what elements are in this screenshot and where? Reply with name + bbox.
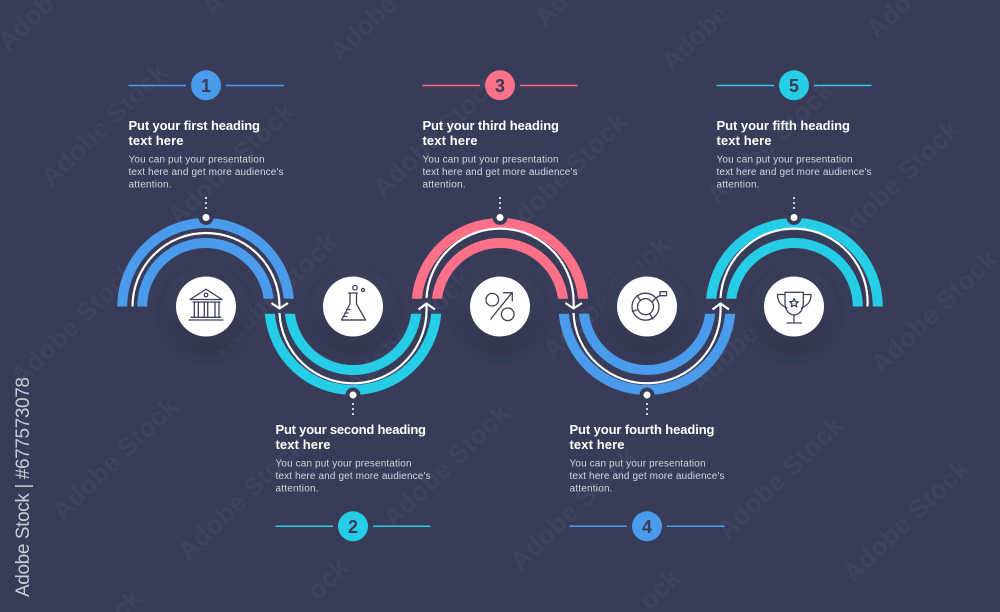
watermark pattern: Adobe Stock [367,68,505,203]
step 5 text: text here and get more audience's [716,167,872,178]
watermark pattern: ock [301,552,355,605]
step 5 text [716,118,872,191]
step 3 text: You can put your presentation [422,155,558,166]
step 1 text: Put your first heading [128,118,260,133]
node markers with dots [198,197,802,415]
step 3 text: attention. [422,180,466,191]
step 2 text [276,422,430,495]
step 2 text: You can put your presentation [276,459,412,470]
watermark pattern: Adobe Stock [162,96,300,231]
step 5 badge [716,70,872,100]
watermark pattern: Adobe Stock [495,107,633,242]
watermark pattern: Adobe Stock [172,431,310,566]
step 3 badge: 3 [495,76,505,96]
step 4 text [570,422,724,495]
step 5 text: Put your fifth heading [716,118,850,133]
step 2 badge [276,511,430,541]
step 5 text: text here [716,133,772,148]
step 4 badge [570,511,724,541]
step 4 text: You can put your presentation [570,459,706,470]
watermark pattern: Adobe Stock [865,244,1000,379]
step 1 text: text here [128,133,184,148]
watermark pattern: Adobe Stock [537,230,675,365]
watermark pattern: Adobe Stock [837,453,975,588]
arc 2: cyan [265,314,441,395]
step 1 text: attention. [128,180,172,191]
icon: percent arrow [470,276,530,336]
step 3 text: text here [422,133,478,148]
step 4 badge: 4 [642,517,652,537]
watermark pattern: Adobe Stock [827,114,965,249]
step 2 text: text here and get more audience's [276,471,430,482]
watermark pattern: Adobe Stock [711,410,849,545]
connector arrows [132,229,868,383]
watermark pattern: Adobe Stock [339,264,477,399]
watermark pattern: Adobe Stock [46,391,184,526]
step 1 badge [128,70,284,100]
watermark pattern: Adobe Stock [35,57,173,192]
side credit: Adobe Stock | #677573078 [13,377,34,597]
arc 4: blue [559,314,735,395]
step 4 text: text here and get more audience's [570,471,724,482]
icon shadow discs [163,266,837,352]
step 1 text [128,118,284,191]
step 2 badge: 2 [348,517,358,537]
step 2 text: attention. [276,484,318,495]
watermark pattern: Adobe Stock [205,227,343,362]
step 3 text [422,118,578,191]
step 5 text: attention. [716,180,760,191]
step 3 text: text here and get more audience's [422,167,578,178]
step 2 text: Put your second heading [276,422,426,437]
icon: bank [176,276,236,336]
watermark pattern: Adobe Stock [377,398,515,533]
icon: flask [323,276,383,336]
step 1 text: text here and get more audience's [128,167,284,178]
watermark pattern: Adobe Stock [701,75,839,210]
watermark pattern: Adobe Stock [5,256,143,391]
arc 5: cyan [706,218,883,306]
arc 3: pink [412,218,588,299]
step 4 text: text here [570,437,624,452]
step 1 badge: 1 [201,76,211,96]
step 5 badge: 5 [789,76,799,96]
step 3 text: Put your third heading [422,118,559,133]
icon: ring target with flag [617,276,677,336]
arc 1: blue [117,218,294,306]
watermark pattern: Adobe Stock [684,262,822,397]
step 1 text: You can put your presentation [128,155,264,166]
step 4 text: attention. [570,484,612,495]
step 3 badge [422,70,578,100]
step 5 text: You can put your presentation [716,155,852,166]
icon: trophy [764,276,824,336]
watermark pattern: Adobe [655,0,734,76]
step 2 text: text here [276,437,330,452]
watermark pattern: Adobe Stock [504,441,642,576]
step 4 text: Put your fourth heading [570,422,715,437]
